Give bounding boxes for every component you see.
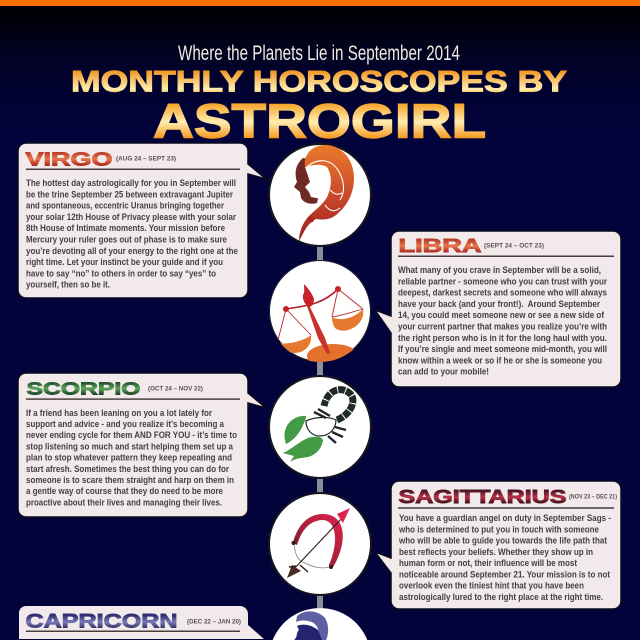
- body text: who will be able to guide you towards the life path that: [398, 536, 607, 546]
- heading: SCORPIO: [26, 378, 140, 398]
- heading: SAGITTARIUS: [398, 487, 566, 507]
- body text: human form or not, their influence will be most: [399, 558, 577, 568]
- body text: deepest, darkest secrets and someone who will always: [398, 288, 607, 298]
- body text: you’re devoting all of your energy to the right one at the: [26, 246, 238, 256]
- body text: reliable partner - someone who you can trust with your: [398, 276, 607, 286]
- body text: You have a guardian angel on duty in September Sags -: [399, 513, 611, 523]
- body text: have to say “no” to others in order to say “yes” to: [26, 268, 217, 278]
- icon: Capricorn: [273, 608, 367, 640]
- top orange bar: [0, 0, 640, 6]
- body text: your current partner that makes you realize you’re with: [398, 322, 607, 332]
- body text: plan to stop whatever pattern they keep repeating and: [26, 453, 232, 463]
- icon: Virgo: [269, 144, 371, 246]
- header: [71, 42, 567, 148]
- body text: yourself, then so be it.: [26, 280, 110, 290]
- body text: know within a week or so if he or she is someone you: [398, 355, 602, 365]
- body text: best reflects your beliefs. Whether they show up in: [399, 547, 593, 557]
- body text: who is determined to put you in touch with someone: [398, 524, 599, 534]
- body text: the right person who is in it for the long haul with you.: [398, 333, 607, 343]
- body text: someone is to scare them straight and harp on them in: [26, 475, 234, 485]
- icon: Sagittarius: [269, 493, 371, 595]
- body text: [398, 513, 611, 602]
- panel: Capricorn: [19, 606, 264, 639]
- body text: right time. Let your instinct be your guide and if you: [26, 257, 223, 267]
- body text: What many of you crave in September will be a solid,: [398, 265, 601, 275]
- connector line: [317, 240, 323, 640]
- body text: If a friend has been leaning on you a lot lately for: [26, 408, 212, 418]
- body text: a gentle way of course that they do need to be more: [26, 486, 223, 496]
- panel: Sagittarius: [375, 481, 621, 609]
- body text: can add to your mobile!: [398, 367, 489, 377]
- body text: 14, you could meet someone new or see a new side of: [398, 310, 604, 320]
- panel: Libra: [375, 231, 621, 387]
- body text: be the trine September 25 between extravagant Jupiter: [26, 189, 233, 199]
- icon: Scorpio: [269, 376, 371, 478]
- body text: Mercury your ruler goes out of phase is to make sure: [26, 234, 227, 244]
- heading: CAPRICORN: [26, 612, 178, 632]
- icon: Libra: [269, 260, 371, 368]
- title line: MONTHLY HOROSCOPES BY: [71, 66, 567, 98]
- title name: ASTROGIRL: [153, 96, 486, 148]
- panel: Scorpio: [18, 373, 266, 517]
- body text: never ending cycle for them AND FOR YOU - it’s time to: [26, 430, 238, 440]
- heading: VIRGO: [26, 148, 112, 170]
- body text: support and advice - and you realize it’s becoming a: [26, 419, 224, 429]
- dates: (DEC 22 – JAN 20): [187, 618, 241, 626]
- body text: and spontaneous, eccentric Uranus bringing together: [26, 201, 224, 211]
- body text: have your back (and your front!). Around September: [398, 299, 600, 309]
- heading: LIBRA: [398, 236, 482, 256]
- body text: proactive about their lives and managing their lives.: [26, 497, 222, 507]
- dates: (SEPT 24 – OCT 23): [484, 242, 544, 250]
- body text: noticeable around September 21. Your mission is to not: [399, 569, 610, 579]
- body text: 8th House of Intimate moments. Your mission before: [26, 223, 225, 233]
- body text: your solar 12th House of Privacy please with your solar: [26, 212, 236, 222]
- body text: [26, 178, 238, 290]
- body text: If you’re single and meet someone mid-month, you will: [398, 344, 607, 354]
- body text: start afresh. Sometimes the best thing you can do for: [26, 464, 229, 474]
- body text: overlook even the tiniest hint that you have been: [399, 580, 584, 590]
- body text: [398, 265, 607, 377]
- dates: (OCT 24 – NOV 22): [148, 386, 203, 392]
- body text: The hottest day astrologically for you in September will: [26, 178, 236, 188]
- dates: (AUG 24 – SEPT 23): [116, 156, 176, 162]
- panel: Virgo: [18, 143, 266, 298]
- body text: stop listening so much and start helping them set up a: [26, 441, 233, 451]
- body text: [26, 408, 238, 507]
- subtitle: Where the Planets Lie in September 2014: [178, 42, 460, 65]
- body text: astrologically lured to the right place at the right time.: [399, 592, 603, 602]
- dates: (NOV 23 – DEC 21): [569, 494, 617, 500]
